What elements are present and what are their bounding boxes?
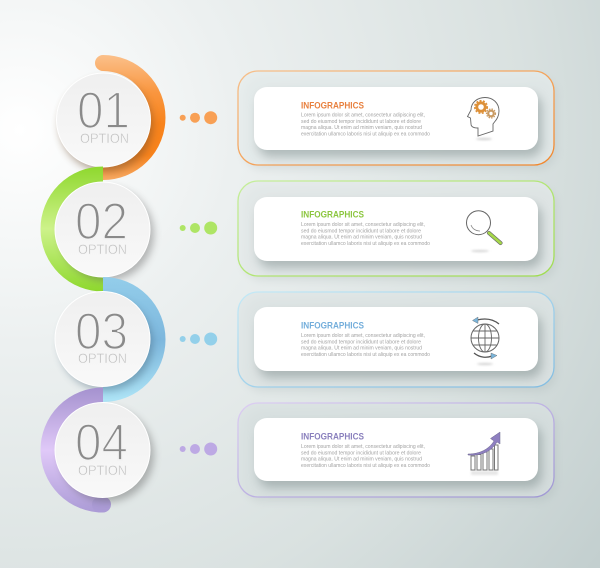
body text [301, 333, 430, 358]
panel 3 [238, 292, 557, 392]
circle shadow [59, 78, 153, 172]
heading: INFOGRAPHICS [301, 432, 364, 442]
body text: Lorem ipsum dolor sit amet, consectetur adipiscing elit, [301, 333, 425, 339]
body text: sed do eiusmod tempor incididunt ut labore et dolore [301, 119, 421, 125]
disc [55, 402, 150, 498]
icon: head with gears [468, 98, 499, 140]
panel shadow [243, 297, 557, 392]
body text: magna aliqua. Ut enim ad minim veniam, quis nostrud [301, 125, 422, 131]
panel frame [238, 403, 554, 497]
number 03: 03 [75, 303, 128, 361]
label OPTION: OPTION [78, 241, 127, 257]
panel shadow [243, 408, 557, 502]
card [254, 307, 538, 371]
heading: INFOGRAPHICS [301, 100, 364, 110]
dots row 2 [180, 222, 217, 234]
dots row 3 [180, 332, 217, 346]
body text: Lorem ipsum dolor sit amet, consectetur adipiscing elit, [301, 222, 425, 228]
body text: exercitation ullamco laboris nisi ut aliquip ex ea commodo [301, 131, 430, 137]
green arc [48, 174, 103, 284]
label OPTION: OPTION [78, 350, 127, 366]
circle shadow [59, 297, 153, 391]
card [254, 418, 538, 481]
number 02: 02 [75, 193, 128, 251]
body text: magna aliqua. Ut enim ad minim veniam, quis nostrud [301, 234, 422, 240]
body text [301, 112, 430, 137]
body text: magna aliqua. Ut enim ad minim veniam, quis nostrud [301, 456, 422, 462]
body text: sed do eiusmod tempor incididunt ut labore et dolore [301, 450, 421, 456]
circle shadow [60, 408, 154, 502]
body text: magna aliqua. Ut enim ad minim veniam, quis nostrud [301, 346, 422, 352]
body text: Lorem ipsum dolor sit amet, consectetur adipiscing elit, [301, 444, 425, 450]
disc [55, 292, 150, 386]
body text: sed do eiusmod tempor incididunt ut labore et dolore [301, 339, 421, 345]
label OPTION: OPTION [80, 130, 129, 146]
panel 4 [238, 403, 557, 502]
panel shadow [243, 186, 557, 281]
step 2: circle and arc [48, 174, 154, 284]
circle shadow [60, 187, 154, 281]
step 1: circle and arc [56, 63, 157, 172]
panel 2 [238, 181, 557, 281]
number 04: 04 [75, 414, 128, 472]
dots row 4 [180, 442, 217, 456]
card shadow [258, 94, 542, 157]
body text: Lorem ipsum dolor sit amet, consectetur adipiscing elit, [301, 112, 425, 118]
icon: globe with arrows [471, 317, 499, 365]
dots row 1 [180, 111, 217, 124]
step 3: circle and arc [55, 285, 158, 394]
card [254, 197, 538, 261]
body text [301, 444, 430, 469]
purple arc [48, 396, 103, 504]
icon: growth chart [468, 432, 500, 475]
body text: exercitation ullamco laboris nisi ut aliquip ex ea commodo [301, 241, 430, 247]
disc [56, 73, 150, 167]
heading: INFOGRAPHICS [301, 210, 364, 220]
card shadow [258, 314, 542, 378]
step 4: circle and arc [48, 396, 154, 504]
orange arc [103, 63, 157, 172]
body text [301, 222, 430, 247]
panel frame [238, 292, 554, 387]
card shadow [258, 425, 542, 488]
body text: exercitation ullamco laboris nisi ut aliquip ex ea commodo [301, 463, 430, 469]
panel frame [238, 181, 554, 276]
blue arc [103, 285, 158, 394]
number 01: 01 [77, 82, 130, 140]
card shadow [258, 204, 542, 268]
panel shadow [243, 76, 557, 170]
body text: exercitation ullamco laboris nisi ut aliquip ex ea commodo [301, 352, 430, 358]
disc [55, 182, 150, 277]
panel frame [238, 71, 554, 165]
arc end cap [100, 496, 103, 512]
panel 1 [238, 71, 557, 170]
heading: INFOGRAPHICS [301, 320, 364, 330]
card [254, 87, 538, 150]
body text: sed do eiusmod tempor incididunt ut labore et dolore [301, 228, 421, 234]
label OPTION: OPTION [78, 462, 127, 478]
icon: magnifying glass [466, 211, 500, 252]
